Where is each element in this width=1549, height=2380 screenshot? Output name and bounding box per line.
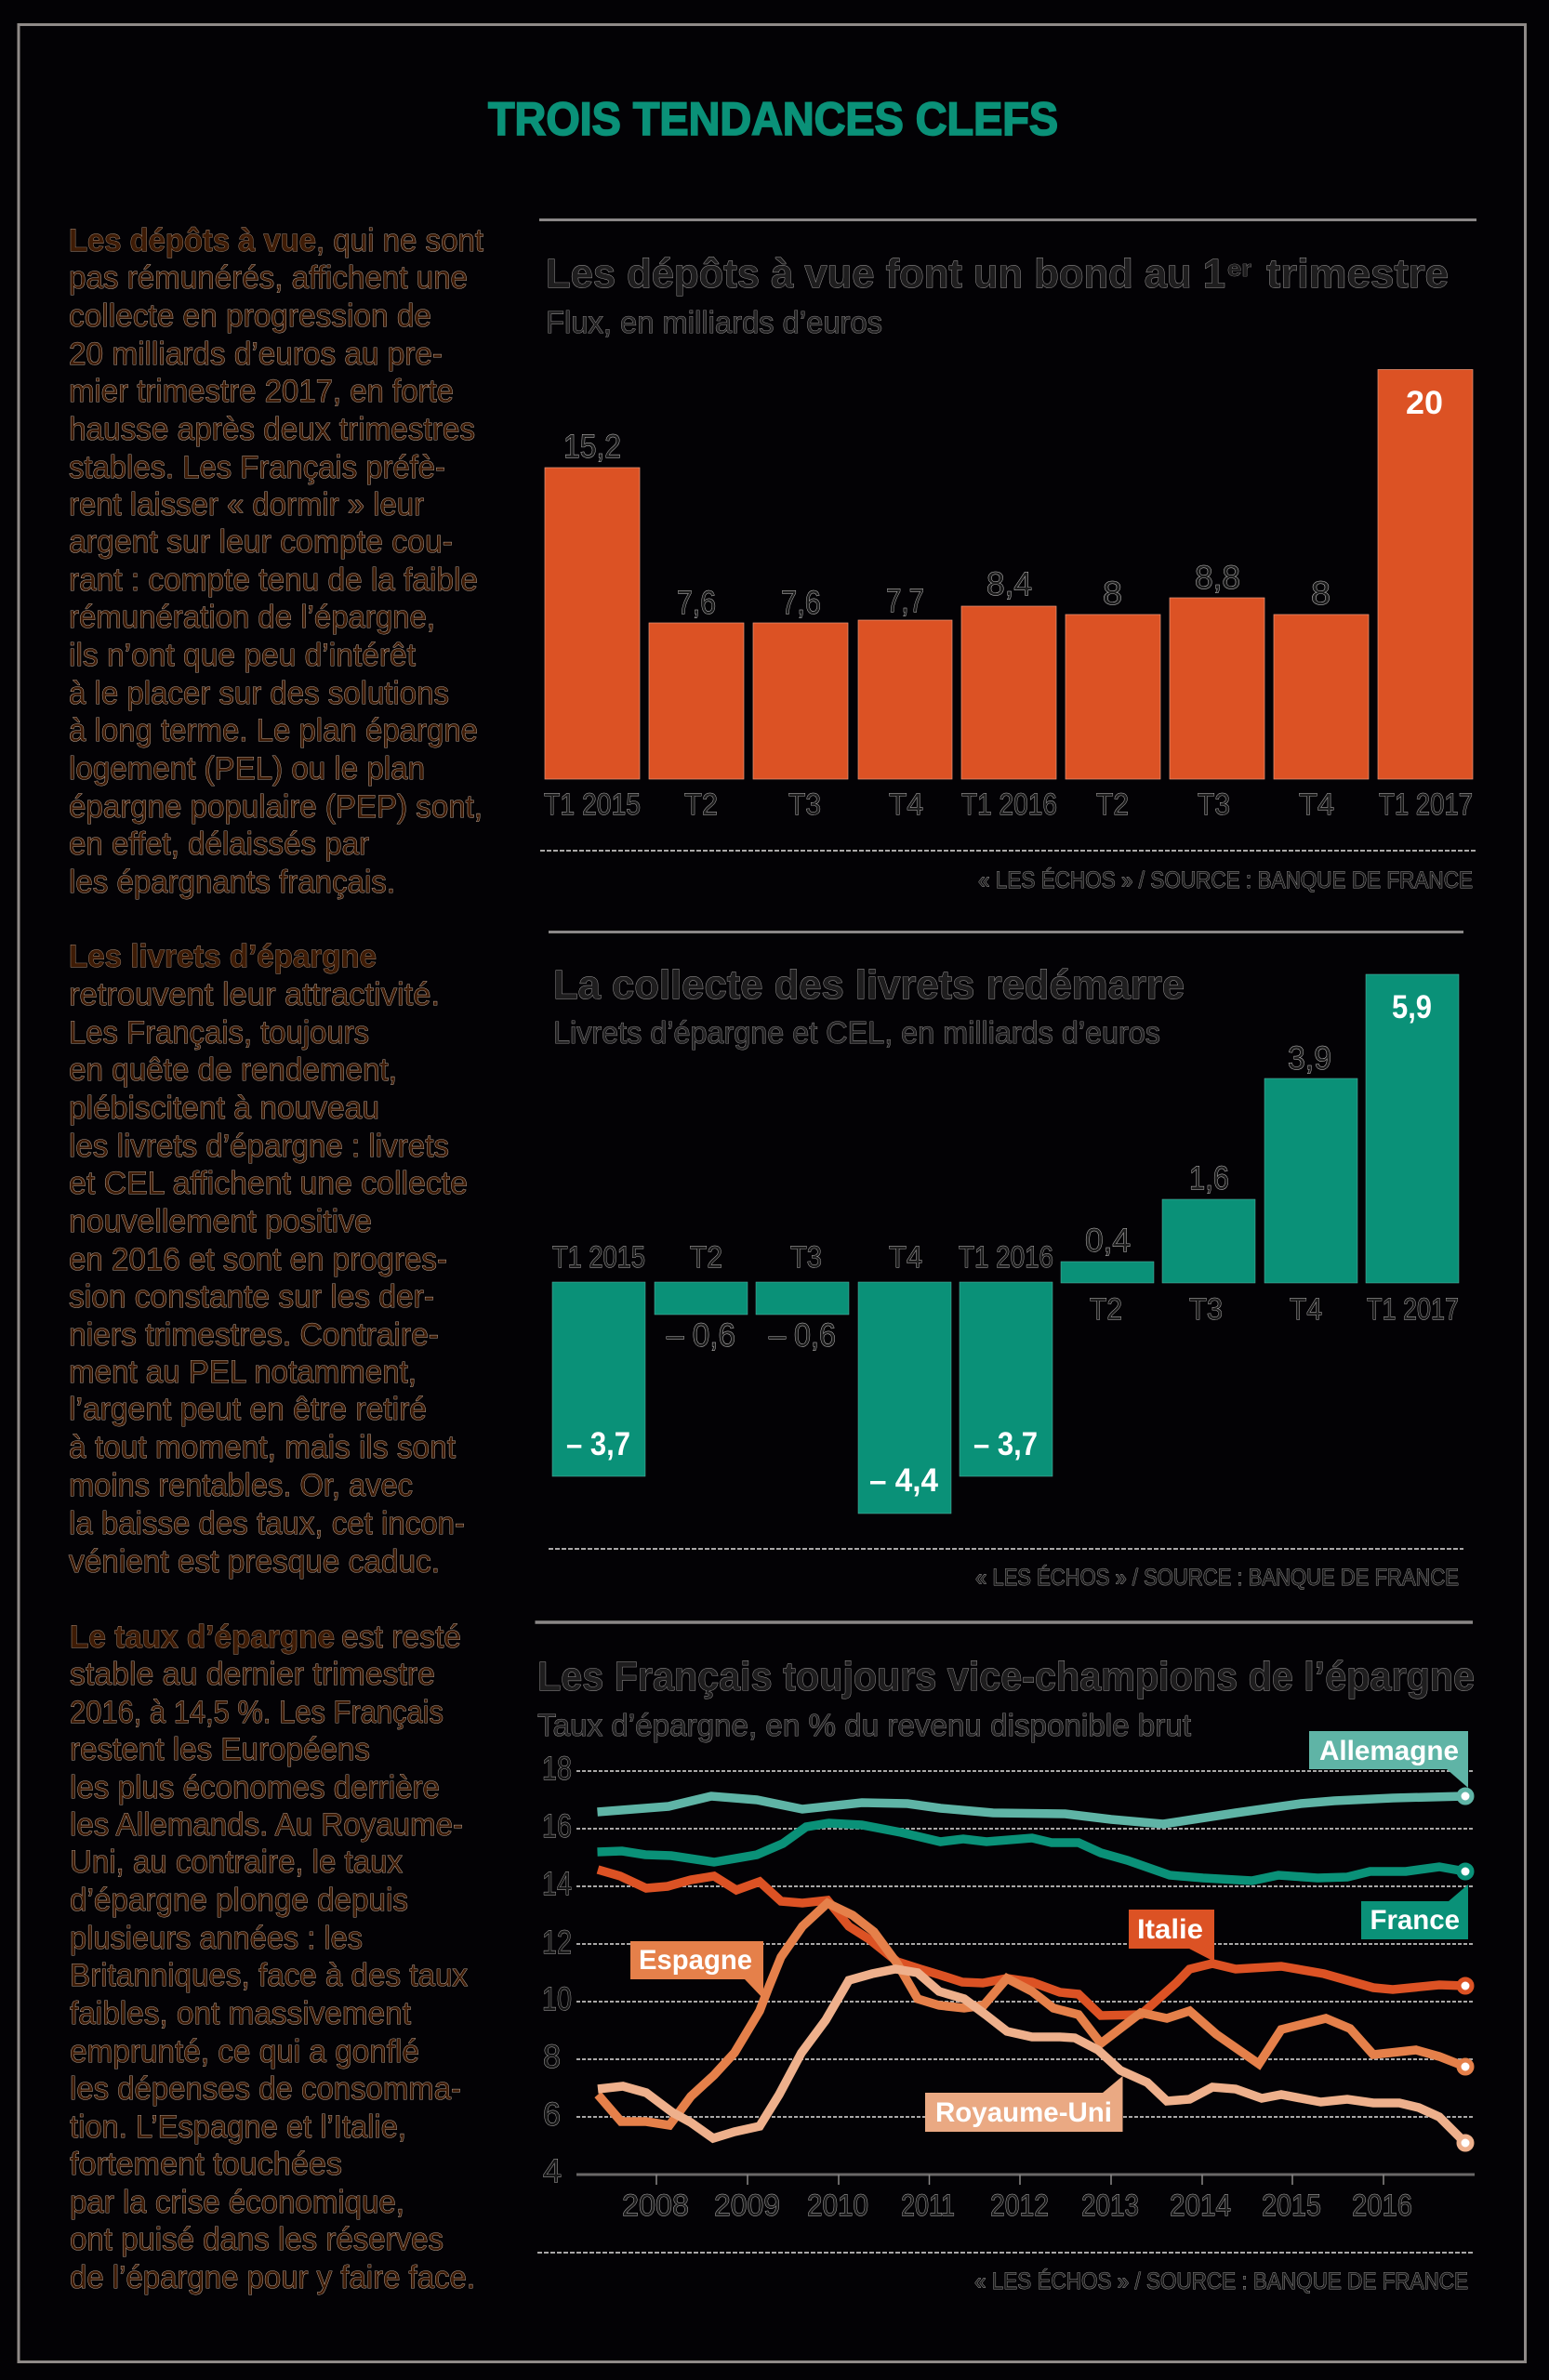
- source: « LES ÉCHOS » / SOURCE : BANQUE DE FRANCE: [975, 1564, 1459, 1591]
- bar values: 5,9: [1392, 989, 1432, 1025]
- text block: dépôts à vue: [69, 223, 484, 900]
- text block: dépôts à vue: rant : compte tenu de la faible: [69, 562, 478, 598]
- callout: Espagne: Espagne: [639, 1945, 752, 1976]
- text block: taux d'épargne: d’épargne plonge depuis: [70, 1883, 408, 1918]
- text block: livrets d'épargne: retrouvent leur attractivité.: [69, 977, 440, 1012]
- bar values: 20: [1406, 385, 1443, 421]
- x axis labels: T3: [790, 1240, 822, 1274]
- panel: left column text: [69, 223, 484, 2295]
- x axis labels: T1 2015: [544, 787, 641, 821]
- text block: livrets d'épargne: moins rentables. Or, avec: [69, 1468, 413, 1503]
- text block: livrets d'épargne: ment au PEL notamment,: [69, 1355, 417, 1390]
- x axis year labels: 2009: [714, 2188, 780, 2222]
- bar values: 3,9: [1288, 1040, 1331, 1077]
- x axis labels: T2: [1096, 787, 1129, 821]
- x axis labels: T3: [1198, 787, 1230, 821]
- text block: dépôts à vue: 20 milliards d’euros au pre-: [69, 337, 443, 372]
- source: « LES ÉCHOS » / SOURCE : BANQUE DE FRANCE: [974, 2268, 1468, 2294]
- x axis labels: T1 2017: [1379, 787, 1473, 821]
- line: Allemagne: [597, 1796, 1465, 1824]
- y axis labels: 16: [542, 1808, 572, 1844]
- panel: dépôts à vue chart: [539, 219, 1476, 893]
- callout: Espagne: [630, 1941, 763, 1999]
- x axis year labels: 2008: [622, 2188, 689, 2222]
- x axis year labels: 2014: [1170, 2188, 1231, 2222]
- y axis labels: [542, 1751, 572, 2189]
- callout: France: France: [1370, 1905, 1460, 1936]
- bar values: – 0,6: [769, 1317, 836, 1354]
- x axis labels: T1 2016: [959, 1240, 1053, 1274]
- text block: livrets d'épargne: nouvellement positive: [69, 1204, 372, 1239]
- text block: livrets d'épargne: les livrets d’épargne : livrets: [69, 1129, 449, 1164]
- text block: dépôts à vue: Les dépôts à vue: [69, 223, 316, 258]
- line: Espagne: [598, 1903, 1465, 2125]
- x axis labels: T4: [1290, 1292, 1322, 1326]
- bar values: 7,6: [677, 585, 716, 621]
- text block: taux d'épargne: les dépenses de consomma-: [70, 2071, 461, 2107]
- bar values: – 3,7: [566, 1426, 630, 1462]
- text block: dépôts à vue: logement (PEL) ou le plan: [69, 751, 425, 787]
- heading: vice-champions: Les Français toujours vice-champions de l’épargne: [537, 1654, 1475, 1699]
- text block: dépôts à vue: rent laisser « dormir » leur: [69, 487, 424, 522]
- x axis labels: T2: [684, 787, 718, 821]
- x axis year labels: [622, 2188, 1412, 2222]
- y axis labels: 6: [543, 2096, 561, 2133]
- bar values: 7,7: [886, 583, 924, 619]
- x axis labels: T3: [1189, 1292, 1223, 1326]
- x axis labels: T4: [889, 1240, 922, 1274]
- bar values: 1,6: [1189, 1160, 1229, 1197]
- heading: dépôts à vue: trimestre: [1266, 251, 1449, 297]
- bar values: 8: [1103, 575, 1122, 612]
- text block: taux d'épargne: par la crise économique,: [70, 2185, 404, 2220]
- bar values: – 4,4: [869, 1462, 938, 1499]
- bar values: [563, 385, 1443, 621]
- text block: dépôts à vue: hausse après deux trimestres: [69, 412, 475, 447]
- x axis ticks: [656, 2175, 1384, 2185]
- y axis labels: 12: [542, 1924, 572, 1961]
- y axis labels: 4: [543, 2153, 562, 2189]
- heading: dépôts à vue: Les dépôts à vue font un bond au 1: [546, 251, 1225, 297]
- x axis labels: T3: [788, 787, 821, 821]
- bar values: 15,2: [563, 429, 621, 465]
- text block: taux d'épargne: Britanniques, face à des taux: [70, 1958, 468, 1993]
- text block: taux d'épargne: plusieurs années : les: [70, 1921, 363, 1956]
- text block: taux d'épargne: stable au dernier trimestre: [70, 1657, 435, 1692]
- x axis year labels: 2016: [1352, 2188, 1412, 2222]
- text block: taux d'épargne: de l’épargne pour y faire face.: [70, 2260, 475, 2295]
- x axis labels: T2: [1090, 1292, 1122, 1326]
- x axis year labels: 2010: [807, 2188, 868, 2222]
- bar values: [566, 989, 1432, 1499]
- text block: dépôts à vue: pas rémunérés, affichent une: [69, 260, 468, 296]
- text block: livrets d'épargne: en 2016 et sont en progres-: [69, 1242, 447, 1277]
- text block: dépôts à vue: rémunération de l’épargne,: [69, 600, 435, 635]
- text block: taux d'épargne: Le taux d’épargne: [70, 1620, 335, 1655]
- text block: dépôts à vue: à le placer sur des solutions: [69, 676, 449, 711]
- text block: dépôts à vue: mier trimestre 2017, en forte: [69, 374, 454, 409]
- bar values: – 3,7: [973, 1426, 1038, 1462]
- line: Italie: [598, 1870, 1465, 2016]
- text block: livrets d'épargne: Les Français, toujours: [69, 1015, 369, 1051]
- x axis year labels: 2011: [901, 2188, 955, 2222]
- x axis year labels: 2015: [1262, 2188, 1321, 2222]
- subtitle: Livrets d’épargne et CEL, en milliards d’euros: [553, 1015, 1160, 1050]
- line: Royaume-Uni: [598, 1969, 1465, 2143]
- callout: Italie: [1129, 1910, 1214, 1962]
- line: France: [597, 1823, 1465, 1881]
- callout: France: [1361, 1884, 1468, 1939]
- x axis labels: T4: [1299, 787, 1334, 821]
- callout: Italie: Italie: [1137, 1914, 1203, 1945]
- x axis labels: T1 2016: [961, 787, 1057, 821]
- subtitle: Taux d’épargne, en % du revenu disponible brut: [537, 1708, 1191, 1742]
- text block: taux d'épargne: restent les Européens: [70, 1732, 370, 1767]
- end markers: [1459, 1790, 1472, 2149]
- y axis labels: 8: [543, 2039, 561, 2075]
- text block: livrets d'épargne: à tout moment, mais ils sont: [69, 1430, 457, 1465]
- panel: livrets chart: [549, 932, 1463, 1591]
- text block: livrets d'épargne: plébiscitent à nouveau: [69, 1091, 379, 1126]
- y axis labels: 10: [542, 1981, 572, 2017]
- text block: taux d'épargne: emprunté, ce qui a gonflé: [70, 2034, 419, 2069]
- text block: dépôts à vue: en effet, délaissés par: [69, 826, 369, 862]
- text block: livrets d'épargne: l’argent peut en être retiré: [69, 1392, 427, 1427]
- text block: taux d'épargne: 2016, à 14,5 %. Les Français: [70, 1695, 444, 1730]
- text block: livrets d'épargne: en quête de rendement,: [69, 1052, 397, 1088]
- callout: Allemagne: [1309, 1731, 1468, 1788]
- text block: livrets d'épargne: niers trimestres. Contraire-: [69, 1317, 439, 1353]
- x axis labels: T1 2017: [1367, 1292, 1459, 1326]
- text block: dépôts à vue: stables. Les Français préfè-: [69, 450, 445, 485]
- text block: dépôts à vue: argent sur leur compte cou-: [69, 524, 453, 560]
- bar values: 8: [1311, 575, 1331, 612]
- subtitle: Flux, en milliards d’euros: [546, 305, 882, 339]
- text block: taux d'épargne: les plus économes derrière: [70, 1770, 440, 1805]
- callout: Royaume-Uni: [925, 2076, 1123, 2132]
- text block: dépôts à vue: épargne populaire (PEP) sont,: [69, 789, 483, 825]
- text block: livrets d'épargne: Les livrets d’épargne: [69, 939, 377, 974]
- text block: livrets d'épargne: vénient est presque caduc.: [69, 1544, 440, 1580]
- text block: dépôts à vue: à long terme. Le plan épargne: [69, 713, 478, 748]
- text block: taux d'épargne: est resté: [341, 1620, 461, 1655]
- heading: dépôts à vue: er: [1227, 257, 1251, 282]
- text block: dépôts à vue: collecte en progression de: [69, 298, 431, 334]
- bar values: – 0,6: [667, 1317, 735, 1354]
- text block: livrets d'épargne: [69, 939, 468, 1580]
- callout: Allemagne: Allemagne: [1319, 1736, 1459, 1766]
- bar values: 8,4: [986, 566, 1032, 602]
- text block: taux d'épargne: tion. L’Espagne et l’Italie,: [70, 2109, 406, 2145]
- text block: taux d'épargne: Uni, au contraire, le taux: [70, 1844, 403, 1880]
- text block: taux d'épargne: fortement touchées: [70, 2147, 342, 2182]
- text block: taux d'épargne: les Allemands. Au Royaume-: [70, 1807, 463, 1843]
- y axis labels: 18: [542, 1751, 572, 1787]
- bar values: 0,4: [1085, 1223, 1131, 1259]
- title: TROIS TENDANCES CLEFS: [488, 93, 1058, 145]
- text block: dépôts à vue: , qui ne sont: [316, 223, 484, 258]
- text block: livrets d'épargne: et CEL affichent une collecte: [69, 1166, 468, 1201]
- text block: taux d'épargne: faibles, ont massivement: [70, 1996, 412, 2031]
- bar values: 7,6: [781, 585, 821, 621]
- x axis year labels: 2012: [990, 2188, 1049, 2222]
- x axis labels: T4: [889, 787, 923, 821]
- bar chart: flux: [545, 370, 1473, 779]
- text block: livrets d'épargne: la baisse des taux, cet incon-: [69, 1506, 465, 1541]
- y axis labels: 14: [542, 1866, 572, 1902]
- bar chart: collecte: [552, 974, 1459, 1514]
- callout: Royaume-Uni: Royaume-Uni: [935, 2097, 1112, 2128]
- x axis labels: T2: [690, 1240, 722, 1274]
- x axis labels: [544, 787, 1473, 821]
- text block: livrets d'épargne: sion constante sur les der-: [69, 1279, 434, 1315]
- text block: dépôts à vue: les épargnants français.: [69, 865, 395, 900]
- x axis year labels: 2013: [1081, 2188, 1139, 2222]
- heading: collecte des livrets: La collecte des livrets redémarre: [553, 962, 1185, 1008]
- text block: dépôts à vue: ils n’ont que peu d’intérêt: [69, 638, 417, 673]
- panel: taux d'épargne line chart: [536, 1622, 1475, 2294]
- text block: taux d'épargne: ont puisé dans les réserves: [70, 2222, 444, 2257]
- text block: taux d'épargne: [70, 1620, 475, 2295]
- x axis labels: [552, 1240, 1459, 1326]
- bar values: 8,8: [1195, 560, 1240, 596]
- x axis labels: T1 2015: [552, 1240, 645, 1274]
- source: « LES ÉCHOS » / SOURCE : BANQUE DE FRANCE: [978, 866, 1473, 893]
